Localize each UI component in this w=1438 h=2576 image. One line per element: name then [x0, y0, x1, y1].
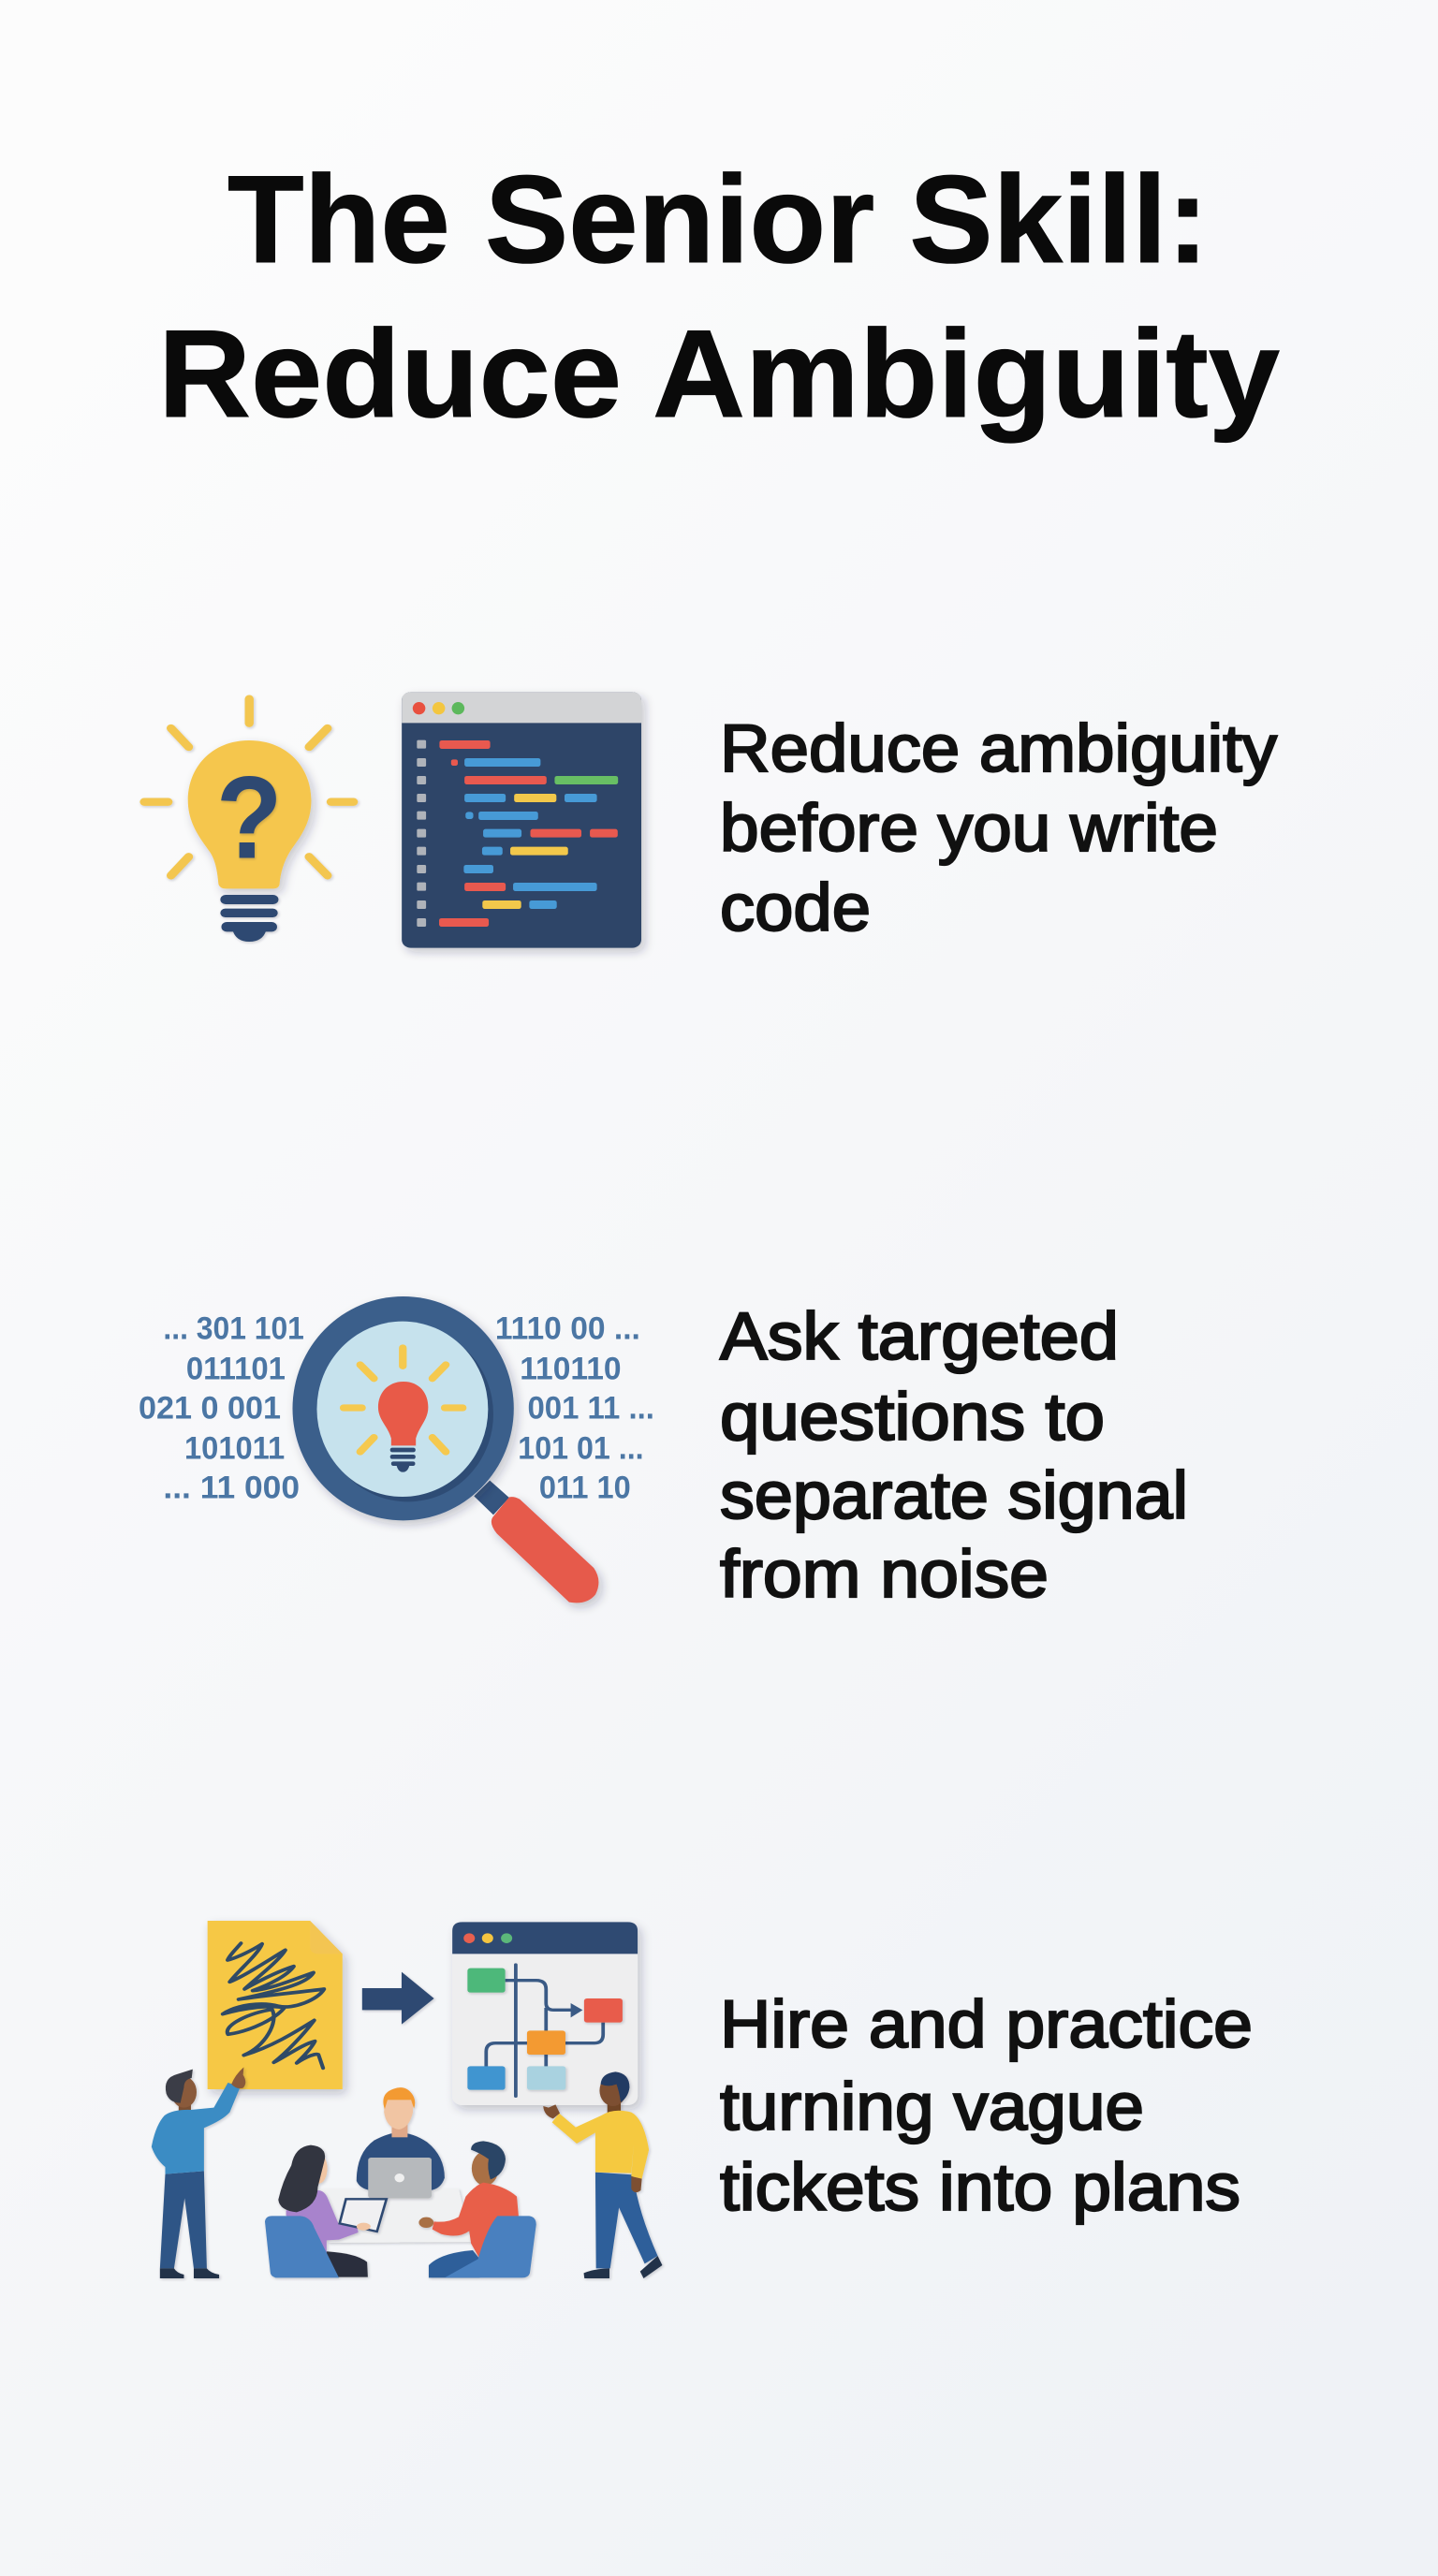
binary digits left: 021 0 001 [139, 1390, 281, 1426]
text: targeted questions: Ask targeted [720, 1300, 1119, 1374]
text: targeted questions: questions to [720, 1381, 1105, 1455]
title [158, 151, 1280, 444]
binary digits right: 101 01 ... [518, 1429, 644, 1466]
text: reduce ambiguity [720, 712, 1278, 945]
person with laptop [357, 2087, 445, 2198]
text: reduce ambiguity: Reduce ambiguity [720, 712, 1278, 786]
binary digits left: ... 301 101 [163, 1310, 304, 1346]
plan window flowchart [452, 1922, 638, 2105]
text: hire and practice: Hire and practice [720, 1988, 1253, 2062]
icon: binary digits with magnifying glass [139, 1296, 654, 1603]
text: targeted questions: separate signal [720, 1459, 1188, 1533]
vague ticket with scribble [208, 1921, 343, 2089]
binary digits left: 101011 [184, 1429, 285, 1466]
binary digits right: 011 10 [539, 1470, 631, 1505]
text: reduce ambiguity: before you write [720, 792, 1218, 866]
title: Reduce Ambiguity [158, 305, 1280, 444]
text: hire and practice: tickets into plans [720, 2151, 1240, 2225]
seated man in red [418, 2141, 536, 2277]
person presenting plan [543, 2071, 662, 2278]
icon: code editor window [402, 692, 641, 948]
binary digits right: 1110 00 ... [495, 1310, 640, 1346]
text: reduce ambiguity: code [720, 871, 871, 945]
meeting table [321, 2188, 471, 2243]
person pointing at ticket [152, 2067, 245, 2278]
seated woman with tablet [265, 2145, 387, 2277]
binary digits left [139, 1310, 304, 1505]
text: hire and practice: turning vague [720, 2071, 1144, 2144]
binary digits left: 011101 [186, 1350, 286, 1386]
text: targeted questions: from noise [720, 1538, 1049, 1612]
binary digits left: ... 11 000 [163, 1470, 300, 1505]
text: hire and practice [720, 1988, 1253, 2225]
icon: lightbulb with question mark: ? [216, 753, 283, 884]
icon: lightbulb with question mark [144, 699, 354, 942]
arrow [362, 1972, 434, 2025]
text: targeted questions [720, 1300, 1188, 1612]
illustration: team turning vague ticket into plan [152, 1921, 662, 2278]
binary digits right [495, 1310, 654, 1505]
binary digits right: 110110 [520, 1350, 622, 1386]
title: The Senior Skill: [227, 151, 1209, 289]
binary digits right: 001 11 ... [527, 1390, 654, 1426]
magnifying glass [292, 1296, 598, 1603]
